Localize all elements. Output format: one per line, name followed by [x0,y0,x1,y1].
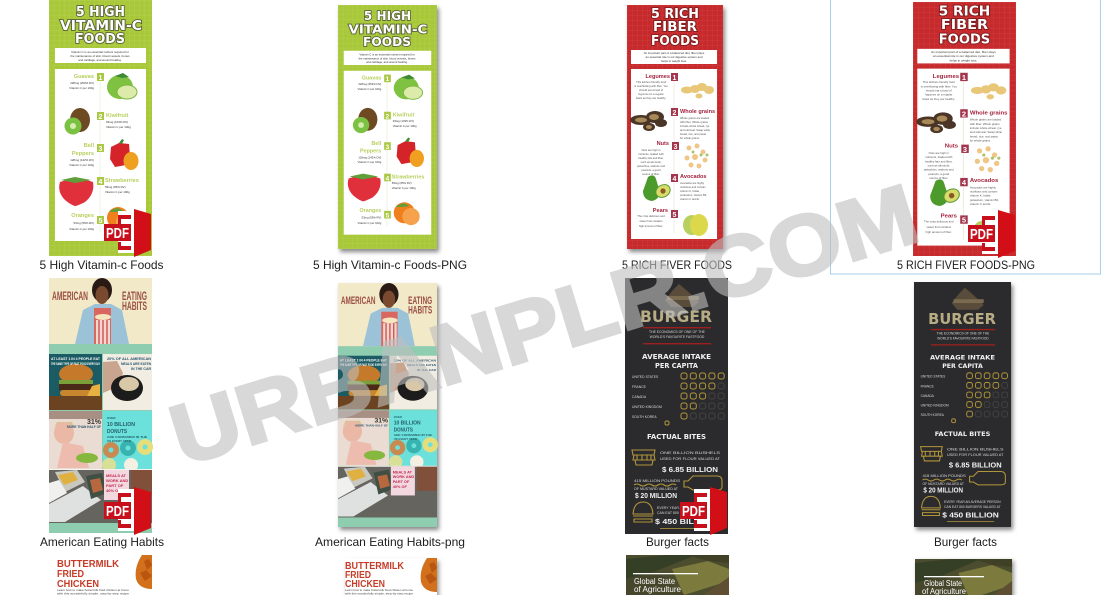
thumbnail: Burger facts (PDF): $ 20 MILLION [635,491,677,500]
thumbnail: Burger facts (PDF): $ 6.85 BILLION [662,465,718,474]
thumbnail: American Eating Habits PNG: MORE THAN HALF OF [355,424,388,428]
thumbnail: 5 High Vitamin-c Foods (PDF): 128mg (142% DV) [70,158,94,162]
thumbnail: American Eating Habits (PDF): AT LEAST 1 IN 4 PEOPLE EAT [51,357,101,361]
thumbnail: Burger facts (PDF): EVERY YEAR AN AVERAGE PERSON [657,506,718,510]
thumbnail: 5 Rich Fiber Foods: legumes on a regular [638,92,664,96]
thumbnail: 5 Rich Fiber Foods PNG: with fiber. Whole grains [970,122,1000,126]
thumbnail: 5 Rich Fiber Foods: should eat a bowl of [639,88,663,92]
thumbnail: 5 Rich Fiber Foods PNG: 4 [962,178,967,187]
thumbnail: 5 Rich Fiber Foods PNG: source of fiber. [929,176,948,180]
thumbnail: 5 Rich Fiber Foods PNG: nutritious and contain [970,190,998,193]
thumbnail: 5 Rich Fiber Foods PNG: include whole wheat, rye [970,126,1002,130]
thumbnail: Burger facts PNG: 415 MILLION POUNDS [922,474,966,478]
thumbnail: 5 High Vitamin-c Foods (PDF): Guavas [74,74,94,80]
thumbnail: 5 High Vitamin-c Foods PNG: the maintenance of skin, blood vessels, bones [359,56,416,60]
thumbnail: American Eating Habits (PDF): IN THE CAR [131,367,152,371]
thumbnail: American Eating Habits (PDF): WORK AND [106,478,128,483]
thumbnail: 5 Rich Fiber Foods PNG: peanuts, a good [928,172,950,176]
thumbnail: 5 Rich Fiber Foods: 5 [672,212,676,219]
thumbnail shadow [629,8,725,252]
thumbnail: 5 Rich Fiber Foods: peanuts, a good [641,168,661,172]
thumbnail: American Eating Habits (PDF): AMERICAN [52,289,88,303]
thumbnail: 5 High Vitamin-c Foods PNG: 4 [386,175,390,182]
thumbnail: American Eating Habits PNG: DONUTS [394,427,413,433]
thumbnail: American Eating Habits PNG [338,283,438,527]
thumbnail: 5 Rich Fiber Foods PNG: Pears [941,214,958,219]
thumbnail: 5 Rich Fiber Foods PNG: basis as they are healthy. [922,97,955,101]
thumbnail: 5 Rich Fiber Foods PNG: 2 [962,110,966,118]
thumbnail: Burger facts PNG: BURGER [928,310,996,328]
thumbnail: 5 Rich Fiber Foods: with fiber. Whole grains [680,120,708,124]
thumbnail: 5 High Vitamin-c Foods PNG: Oranges [359,208,381,214]
thumbnail: Burger facts PNG: WORLD'S FAVOURITE FASTFOOD [937,336,989,340]
thumbnail: American Eating Habits PNG: WORK AND [393,475,414,479]
thumbnail: 5 High Vitamin-c Foods PNG: 5 [386,213,390,220]
thumbnail: 5 Rich Fiber Foods PNG: is overflowing with fiber. You [921,84,957,88]
thumbnail: Burger facts PNG: UNITED STATES [921,375,945,379]
thumbnail: American Eating Habits PNG: EATING [408,295,432,307]
thumbnail: 5 High Vitamin-c Foods (PDF): and cartilage, and wound healing. [78,58,122,62]
thumbnail: 5 Rich Fiber Foods: basis as they are healthy. [636,96,666,100]
thumbnail: Burger facts PNG: AVERAGE INTAKE [930,354,995,362]
thumbnail: 5 Rich Fiber Foods: 5 RICH [651,7,699,22]
PDF icon on vitamin thumbnail [104,209,151,257]
thumbnail: 5 High Vitamin-c Foods (PDF): VITAMIN-C [60,19,142,34]
thumbnail: American Eating Habits (PDF): 40% OF [106,488,121,493]
thumbnail: 5 High Vitamin-c Foods (PDF): 4 [98,179,102,186]
thumbnail: 5 Rich Fiber Foods PNG: for whole grains. [970,139,991,142]
thumbnail: 5 High Vitamin-c Foods (PDF): 3 [98,146,102,153]
thumbnail: 5 High Vitamin-c Foods (PDF): the maintenance of skin, blood vessels, bones [70,54,130,58]
thumbnail: 5 High Vitamin-c Foods (PDF): Oranges [71,213,94,219]
thumbnail: 5 Rich Fiber Foods: Nuts are high in [642,148,661,152]
thumbnail: 5 Rich Fiber Foods: helps in weight loss. [661,59,687,63]
thumbnail: 5 Rich Fiber Foods: Legumes [645,74,670,80]
thumbnail: American Eating Habits PNG: IN THE CAR [417,368,437,372]
thumbnail: 5 Rich Fiber Foods PNG: The crisp delicious and [924,220,954,224]
thumbnail: American Eating Habits PNG: MEALS AT [393,470,413,474]
thumbnail: Buttermilk Fried Chicken PNG: FRIED [345,570,371,581]
thumbnail: 5 High Vitamin-c Foods (PDF): 2 [98,114,102,121]
thumbnail: American Eating Habits (PDF): MEALS AT [106,473,127,478]
filename label: 5 High Vitamin-c Foods [40,258,164,272]
filename label: 5 RICH FIVER FOODS-PNG [897,258,1035,272]
thumbnail: Burger facts PNG: UNITED KINGDOM [921,403,949,407]
PDF icon on fiber thumbnail [968,210,1015,258]
thumbnail: 5 High Vitamin-c Foods (PDF): Peppers [72,151,94,157]
thumbnail: Buttermilk Fried Chicken [57,555,152,595]
thumbnail: 5 Rich Fiber Foods PNG: Nuts [945,144,959,150]
thumbnail: 5 High Vitamin-c Foods PNG: 2 [386,113,390,120]
PDF icon on American Eating Habits thumbnail: PDF [106,503,129,520]
thumbnail: American Eating Habits PNG: AT LEAST 1 IN 4 PEOPLE EAT [340,358,388,362]
thumbnail: 5 High Vitamin-c Foods (PDF): Vitamin C per 100g [105,190,130,194]
watermark: URBANPLR.COM [160,167,929,484]
thumbnail: 5 Rich Fiber Foods: 2 [672,110,676,117]
thumbnail: American Eating Habits (PDF): PART OF [106,483,124,488]
thumbnail: 5 Rich Fiber Foods PNG: and oatmeal. Swap white [970,130,1003,134]
thumbnail: Burger facts PNG: EVERY YEAR AN AVERAGE PERSON [944,500,1001,504]
thumbnail: Global State of Agriculture: Global State [634,577,676,586]
thumbnail: 5 Rich Fiber Foods: sweet fruit contains [639,219,663,223]
thumbnail: American Eating Habits (PDF): OVER [107,416,116,420]
thumbnail: 5 Rich Fiber Foods: 1 [672,75,676,82]
thumbnail: Buttermilk Fried Chicken PNG: Learn how to make buttermilk fried chicken at home [345,588,413,592]
thumbnail: 5 Rich Fiber Foods PNG: Whole grains are loaded [970,118,1002,122]
thumbnail: Burger facts (PDF): SOUTH KOREA [632,415,657,419]
thumbnail: Burger facts (PDF): UNITED KINGDOM [632,405,662,409]
thumbnail: Burger facts (PDF): CAN EAT 800 BURGERS VALUED AT [657,511,717,515]
thumbnail: Burger facts PNG [914,282,1011,527]
thumbnail: American Eating Habits (PDF): 20% OF ALL AMERICAN [107,357,152,361]
thumbnail: 5 Rich Fiber Foods PNG: 3 [963,145,967,154]
thumbnail: 5 Rich Fiber Foods PNG: sweet fruit contains [926,225,952,229]
thumbnail: 5 Rich Fiber Foods PNG: bread, rice, and pasta [970,134,998,138]
filename label: Burger facts [646,535,709,549]
thumbnail: 5 Rich Fiber Foods: vitamin K, folate, [680,189,700,193]
thumbnail: 5 Rich Fiber Foods PNG: such as almonds, [928,164,950,167]
thumbnail: Global State of Agriculture PNG: Global State [924,579,962,588]
thumbnail: 5 High Vitamin-c Foods PNG: Vitamin C per 100g [358,221,382,225]
thumbnail: American Eating Habits (PDF): DONUTS [107,429,127,435]
thumbnail: American Eating Habits PNG: 31% [375,418,388,425]
thumbnail: 5 Rich Fiber Foods PNG: FIBER [941,17,989,33]
thumbnail: 5 Rich Fiber Foods PNG: Legumes [933,74,960,80]
thumbnail shadow [347,561,439,595]
thumbnail: 5 Rich Fiber Foods: Whole grains are loaded [680,116,710,120]
thumbnail: 5 High Vitamin-c Foods (PDF): 1 [98,75,102,82]
thumbnail: Global State of Agriculture [626,555,729,595]
thumbnail: 5 Rich Fiber Foods PNG [913,2,1016,256]
thumbnail: American Eating Habits PNG: OVER [394,415,402,419]
PDF icon on American Eating Habits thumbnail [104,487,151,535]
thumbnail: 5 Rich Fiber Foods PNG: an essential role in our digestive system and [933,54,994,58]
thumbnail: 5 High Vitamin-c Foods (PDF): Kiwifruit [106,113,129,119]
thumbnail: 5 High Vitamin-c Foods PNG: Strawberries [392,174,424,180]
thumbnail: 5 High Vitamin-c Foods (PDF): Bell [84,143,94,149]
thumbnail: 5 High Vitamin-c Foods PNG [338,5,437,249]
thumbnail: Burger facts (PDF): $ 450 BILLION [655,517,715,526]
thumbnail: 5 Rich Fiber Foods: An important part of a balanced diet, fiber plays [644,51,705,55]
thumbnail: 5 High Vitamin-c Foods (PDF): 53mg (59% RV) [73,221,94,225]
thumbnail: Burger facts (PDF): ONE BILLION BUSHELS [660,451,721,455]
thumbnail: American Eating Habits PNG: MEALS ARE EATEN [407,363,436,367]
thumbnail: 5 Rich Fiber Foods: is overflowing with fiber. You [634,84,668,88]
thumbnail: Buttermilk Fried Chicken: BUTTERMILK [57,559,120,570]
thumbnail: Burger facts (PDF) [625,278,728,534]
thumbnail: 5 High Vitamin-c Foods PNG: 228mg (253% DV) [358,82,381,86]
thumbnail: 5 Rich Fiber Foods PNG: legumes on a regular [925,93,952,97]
thumbnail: Burger facts PNG: FACTUAL BITES [935,431,991,438]
thumbnail: 5 Rich Fiber Foods: include whole wheat, rye [680,124,710,128]
thumbnail: American Eating Habits (PDF): ARE CONSUMED IN THE [107,435,147,439]
thumbnail: 5 High Vitamin-c Foods PNG: 1 [386,76,390,83]
thumbnail: 5 High Vitamin-c Foods (PDF): Vitamin C per 100g [69,86,94,90]
thumbnail: 5 High Vitamin-c Foods PNG: Vitamin C is an essential nutrient required for [359,53,415,57]
thumbnail: 5 Rich Fiber Foods: The crisp delicious and [637,214,665,218]
thumbnail: 5 Rich Fiber Foods PNG: 5 RICH [939,4,990,19]
thumbnail: Burger facts PNG: $ 6.85 BILLION [949,461,1002,470]
thumbnail: 5 Rich Fiber Foods: for whole grains. [680,136,700,140]
thumbnail: Burger facts (PDF): WORLD'S FAVOURITE FASTFOOD [650,335,705,339]
thumbnail: 5 Rich Fiber Foods PNG: This kitchen-friendly food [923,80,955,84]
thumbnail: 5 High Vitamin-c Foods PNG: Peppers [360,149,381,155]
thumbnail: 5 Rich Fiber Foods [627,5,723,249]
filename label: American Eating Habits [40,535,164,549]
thumbnail: 5 Rich Fiber Foods PNG: Whole grains [970,110,1008,116]
thumbnail: Burger facts (PDF): OF MUSTARD VALUED AT [634,487,678,491]
thumbnail: 5 Rich Fiber Foods: 3 [674,144,678,151]
thumbnail: Buttermilk Fried Chicken: Learn how to make buttermilk fried chicken at home [57,588,129,592]
thumbnail: 5 High Vitamin-c Foods (PDF): Vitamin C per 100g [69,227,94,231]
thumbnail: American Eating Habits PNG: 40% OF [393,485,408,489]
thumbnail: Burger facts PNG: USED FOR FLOUR VALUED AT [947,453,1004,457]
thumbnail: American Eating Habits PNG: HABITS [408,305,432,317]
thumbnail: Buttermilk Fried Chicken: CHICKEN [57,579,99,590]
thumbnail: 5 High Vitamin-c Foods PNG: FOODS [363,34,411,49]
thumbnail: 5 Rich Fiber Foods PNG: 5 [962,216,966,225]
thumbnail: American Eating Habits (PDF): 10 BILLION [107,422,135,428]
thumbnail: 5 Rich Fiber Foods: Whole grains [680,109,715,115]
thumbnail: American Eating Habits (PDF): MEALS ARE EATEN [121,362,152,366]
thumbnail: American Eating Habits PNG: US EVERY YEAR [394,437,417,441]
thumbnail: Burger facts (PDF): FACTUAL BITES [647,433,706,441]
thumbnail shadow [340,286,439,530]
thumbnail: 5 High Vitamin-c Foods (PDF): Vitamin C per 100g [106,125,131,129]
thumbnail: Buttermilk Fried Chicken: FRIED [57,569,84,580]
thumbnail: 5 High Vitamin-c Foods PNG: 5 HIGH [364,8,411,23]
thumbnail: American Eating Habits (PDF): EATING [122,289,147,303]
thumbnail: Global State of Agriculture PNG [915,559,1012,595]
thumbnail: 5 Rich Fiber Foods: Avocados [680,174,707,180]
thumbnail: 5 High Vitamin-c Foods PNG: 93mg (103% DV) [393,119,414,123]
thumbnail: American Eating Habits PNG: PART OF [393,480,410,484]
thumbnail: 5 Rich Fiber Foods: and oatmeal. Swap white [680,128,711,132]
thumbnail: 5 Rich Fiber Foods PNG: An important part of a balanced diet, fiber plays [931,50,996,54]
thumbnail: 5 Rich Fiber Foods: vitamin C and E. [680,197,700,201]
thumbnail: American Eating Habits PNG: AMERICAN [341,295,375,307]
thumbnail: 5 High Vitamin-c Foods PNG: 53mg (59% RV) [362,215,381,219]
thumbnail: 5 High Vitamin-c Foods PNG: Guavas [362,75,381,81]
thumbnail: 5 Rich Fiber Foods PNG: nutrients, loaded with [925,155,953,159]
thumbnail: 5 High Vitamin-c Foods (PDF): 93mg (103% DV) [106,120,128,124]
thumbnail: Buttermilk Fried Chicken PNG: CHICKEN [345,579,385,590]
thumbnail: 5 Rich Fiber Foods PNG: healthy fats and fiber, [925,159,953,163]
thumbnail: 5 High Vitamin-c Foods (PDF): 5 HIGH [76,5,125,20]
PDF icon on burger thumbnail: PDF [682,503,705,520]
thumbnail: 5 High Vitamin-c Foods PNG: Vitamin C per 100g [358,87,382,91]
thumbnail: 5 High Vitamin-c Foods PNG: and cartilage, and wound healing. [366,60,408,64]
thumbnail: 5 Rich Fiber Foods PNG: potassium, vitamin B6, [970,198,999,202]
thumbnail: Burger facts (PDF): THE ECONOMICS OF ONE OF THE [649,330,706,334]
thumbnail: American Eating Habits PNG: ARE CONSUMED IN THE [394,433,432,437]
thumbnail: 5 Rich Fiber Foods PNG: pistachios, walnuts and [924,168,954,172]
thumbnail: 5 High Vitamin-c Foods (PDF): Vitamin C per 100g [69,163,94,167]
thumbnail: 5 Rich Fiber Foods PNG: high amount of fiber. [926,230,952,234]
selection highlight box [830,0,1100,274]
thumbnail shadow [917,561,1014,595]
PDF icon on fiber thumbnail: PDF [970,226,993,243]
filename label: Burger facts [934,535,997,549]
thumbnail: Burger facts PNG: CANADA [921,394,935,398]
thumbnail: 5 High Vitamin-c Foods PNG: Vitamin C per 100g [358,160,382,164]
thumbnail: Burger facts PNG: PER CAPITA [942,363,983,370]
thumbnail: Burger facts (PDF): UNITED STATES [632,375,659,379]
thumbnail: 5 Rich Fiber Foods PNG: Avocados are highly [970,185,996,189]
thumbnail: 5 High Vitamin-c Foods PNG: Vitamin C per 100g [392,186,416,190]
thumbnail: American Eating Habits (PDF) [49,278,153,533]
thumbnail: 5 High Vitamin-c Foods PNG: Vitamin C per 100g [393,124,417,128]
thumbnail: Burger facts PNG: $ 20 MILLION [923,485,963,495]
thumbnail: 5 High Vitamin-c Foods PNG: 59mg (65% DV) [392,181,412,185]
thumbnail: Burger facts (PDF): USED FOR FLOUR VALUED AT [660,457,720,461]
thumbnail: 5 Rich Fiber Foods: bread, rice, and pasta [680,132,707,136]
thumbnail: Burger facts PNG: THE ECONOMICS OF ONE OF THE [937,332,990,336]
thumbnail: 5 Rich Fiber Foods: nutritious and contain [680,185,706,189]
thumbnail: 5 Rich Fiber Foods: This kitchen-friendly food [636,80,666,84]
thumbnail: 5 Rich Fiber Foods: 4 [672,176,676,183]
thumbnail: Burger facts (PDF): 415 MILLION POUNDS [634,479,681,483]
thumbnail: 5 Rich Fiber Foods PNG: helps in weight loss. [950,58,977,62]
thumbnail: 5 Rich Fiber Foods: source of fiber. [642,172,660,176]
thumbnail: 5 High Vitamin-c Foods PNG: Kiwifruit [393,113,414,118]
thumbnail: 5 Rich Fiber Foods: pistachios, walnuts and [637,164,665,168]
PDF icon on vitamin thumbnail: PDF [106,225,129,242]
thumbnail: 5 Rich Fiber Foods: healthy fats and fiber, [638,156,664,160]
thumbnail: 5 Rich Fiber Foods: FIBER [653,20,697,35]
thumbnail: Burger facts (PDF): PER CAPITA [655,362,699,370]
thumbnail: American Eating Habits PNG: 20% OF ALL AMERICAN [394,358,436,362]
thumbnail: American Eating Habits (PDF): 31% [87,419,102,426]
thumbnail: 5 Rich Fiber Foods: Nuts [657,141,669,147]
thumbnail: Burger facts PNG: FRANCE [921,384,935,388]
thumbnail: 5 High Vitamin-c Foods (PDF): 228mg (253% DV) [70,81,94,85]
thumbnail: 5 High Vitamin-c Foods PNG: Bell [371,141,382,147]
thumbnail: Burger facts (PDF): FRANCE [632,385,647,389]
thumbnail: 5 Rich Fiber Foods PNG: Avocados [970,178,999,184]
thumbnail: 5 Rich Fiber Foods: potassium, vitamin B6, [680,193,707,197]
thumbnail: 5 High Vitamin-c Foods (PDF): 5 [98,218,102,225]
thumbnail: 5 Rich Fiber Foods PNG: should eat a bowl of [926,89,952,93]
thumbnail: 5 Rich Fiber Foods: Avocados are highly [680,181,705,185]
thumbnail: Burger facts PNG: $ 450 BILLION [942,510,999,519]
thumbnail: 5 Rich Fiber Foods: high amount of fiber. [639,224,663,228]
thumbnail: Burger facts (PDF): BURGER [640,307,712,326]
thumbnail: American Eating Habits (PDF): US EVERY YEAR [107,439,132,443]
thumbnail: 5 High Vitamin-c Foods (PDF): Strawberries [105,178,139,184]
thumbnail: American Eating Habits PNG: THE SAME TYPE OF FAST FOOD EVERY DAY [340,363,387,367]
thumbnail: 5 Rich Fiber Foods PNG: 1 [962,73,966,82]
thumbnail: Burger facts PNG: SOUTH KOREA [921,413,945,417]
thumbnail: Burger facts PNG: CAN EAT 800 BURGERS VALUED AT [944,505,1001,509]
thumbnail: Global State of Agriculture: of Agriculture [634,585,682,594]
thumbnail: American Eating Habits (PDF): MORE THAN HALF OF [67,425,101,429]
thumbnail: 5 Rich Fiber Foods: Pears [653,208,668,214]
thumbnail: American Eating Habits (PDF): HABITS [122,299,147,313]
thumbnail: Buttermilk Fried Chicken PNG: BUTTERMILK [345,561,405,572]
thumbnail: 5 Rich Fiber Foods: an essential role in our digestive system and [646,55,703,59]
filename label: 5 High Vitamin-c Foods-PNG [313,258,467,272]
thumbnail: 5 Rich Fiber Foods PNG: vitamin K, folate, [970,194,991,198]
thumbnail: 5 High Vitamin-c Foods PNG: 3 [386,144,390,151]
thumbnail: Buttermilk Fried Chicken PNG [345,558,437,595]
filename label: American Eating Habits-png [315,535,465,549]
thumbnail: American Eating Habits PNG: 10 BILLION [394,421,421,427]
thumbnail: 5 Rich Fiber Foods PNG: FOODS [939,32,990,48]
thumbnail: 5 High Vitamin-c Foods (PDF) [49,0,152,256]
filename label: 5 RICH FIVER FOODS [622,258,732,272]
thumbnail: 5 High Vitamin-c Foods (PDF): Vitamin C is an essential nutrient required for [71,50,129,54]
thumbnail: Burger facts (PDF): CANADA [632,395,647,399]
thumbnail: 5 High Vitamin-c Foods (PDF): FOODS [75,32,125,47]
thumbnail: 5 High Vitamin-c Foods (PDF): 59mg (65% DV) [105,185,126,189]
thumbnail shadow [916,285,1013,530]
thumbnail: Burger facts (PDF): AVERAGE INTAKE [642,353,712,361]
thumbnail: 5 Rich Fiber Foods: such as almonds, [641,160,662,164]
thumbnail: 5 Rich Fiber Foods PNG: Nuts are high in [929,151,949,155]
thumbnail: 5 Rich Fiber Foods: FOODS [651,34,699,49]
thumbnail: 5 High Vitamin-c Foods PNG: VITAMIN-C [349,22,427,37]
thumbnail: 5 Rich Fiber Foods: nutrients, loaded with [638,152,664,156]
thumbnail: Burger facts PNG: OF MUSTARD VALUED AT [922,482,964,486]
thumbnail shadow [340,8,439,252]
PDF icon on burger thumbnail [680,487,727,535]
thumbnail: Burger facts PNG: ONE BILLION BUSHELS [947,447,1003,451]
thumbnail: 5 Rich Fiber Foods PNG: vitamin C and E. [970,202,991,206]
thumbnail: 5 High Vitamin-c Foods PNG: 128mg (142% DV) [358,155,381,159]
thumbnail: American Eating Habits (PDF): THE SAME TYPE OF FAST FOOD EVERY DAY [51,362,100,366]
